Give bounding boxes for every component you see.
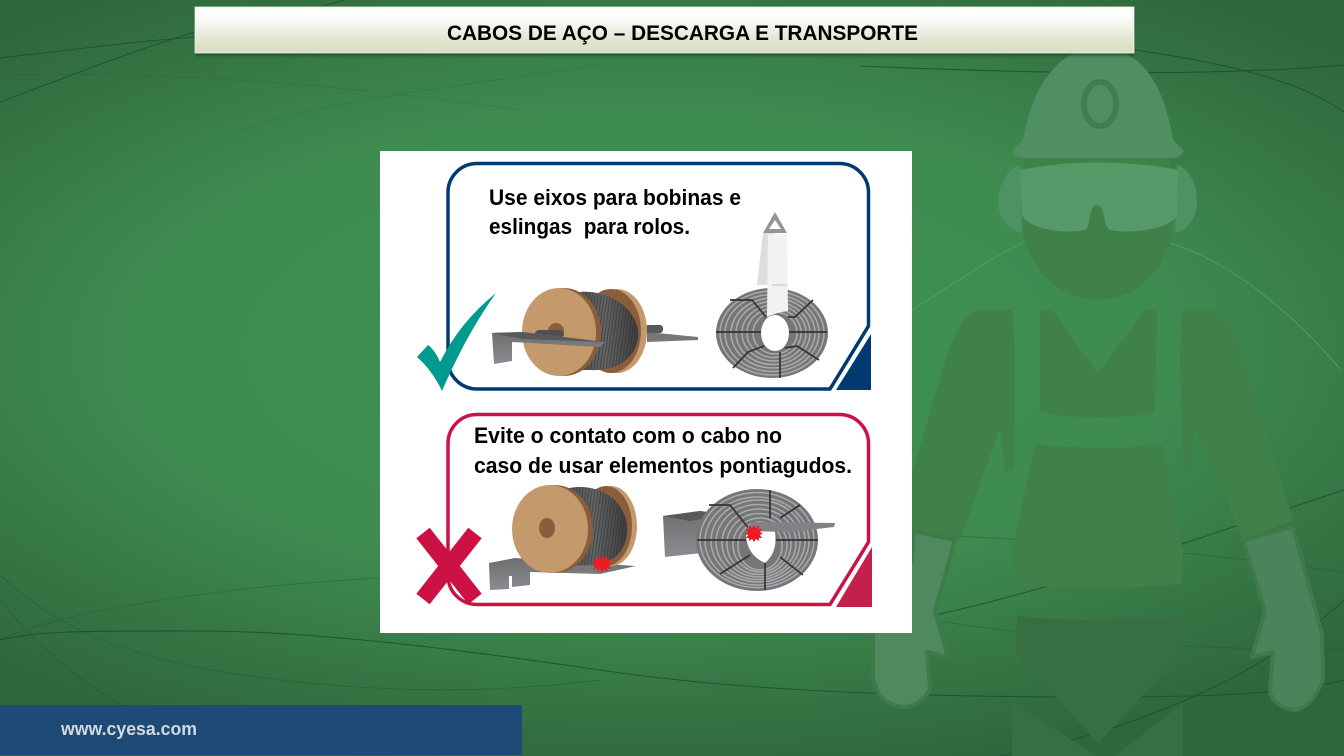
- coil with spark: [663, 489, 835, 591]
- ear protection: [998, 165, 1197, 233]
- panel frame: [448, 163, 869, 389]
- apron: [1012, 444, 1183, 588]
- corner triangle: [836, 547, 872, 607]
- corner triangle: [836, 334, 871, 390]
- lower apron: [1015, 616, 1182, 744]
- instruction text: eslingas para rolos.: [489, 214, 690, 239]
- worker shoulder outline: [912, 243, 1340, 369]
- title bar: [195, 7, 1134, 56]
- warning text: [474, 423, 852, 478]
- watermark: worker silhouette: [873, 47, 1340, 756]
- lower legs: [1012, 703, 1183, 756]
- spark: [745, 525, 763, 542]
- white central panel: [380, 151, 912, 633]
- reel with spark: [489, 485, 637, 590]
- left arm: [912, 310, 1015, 540]
- panel frame: [448, 414, 869, 605]
- right glove: [1243, 527, 1323, 710]
- panel: incorrect handling: [423, 414, 872, 607]
- footer band: www.cyesa.com: [60, 719, 197, 739]
- face: [1023, 158, 1172, 300]
- right arm: [1180, 310, 1293, 540]
- reel on forks: [492, 288, 698, 376]
- instruction text: [489, 185, 741, 239]
- left glove: [873, 531, 955, 707]
- icon: check mark: [417, 293, 496, 391]
- warning text: Evite o contato com o cabo no: [474, 423, 782, 448]
- wire coil with sling: [716, 212, 828, 378]
- warning text: caso de usar elementos pontiagudos.: [474, 453, 852, 478]
- chest panel: [1040, 310, 1157, 418]
- goggles: [1020, 162, 1178, 231]
- instruction text: Use eixos para bobinas e: [489, 185, 741, 210]
- helmet lamp ring: [1084, 82, 1116, 126]
- title bar: CABOS DE AÇO – DESCARGA E TRANSPORTE: [447, 22, 918, 45]
- spark: [592, 555, 612, 573]
- worker helmet: [1013, 47, 1183, 158]
- panel: correct handling: [417, 163, 871, 391]
- footer band: [0, 705, 522, 755]
- icon: cross mark: [423, 533, 475, 599]
